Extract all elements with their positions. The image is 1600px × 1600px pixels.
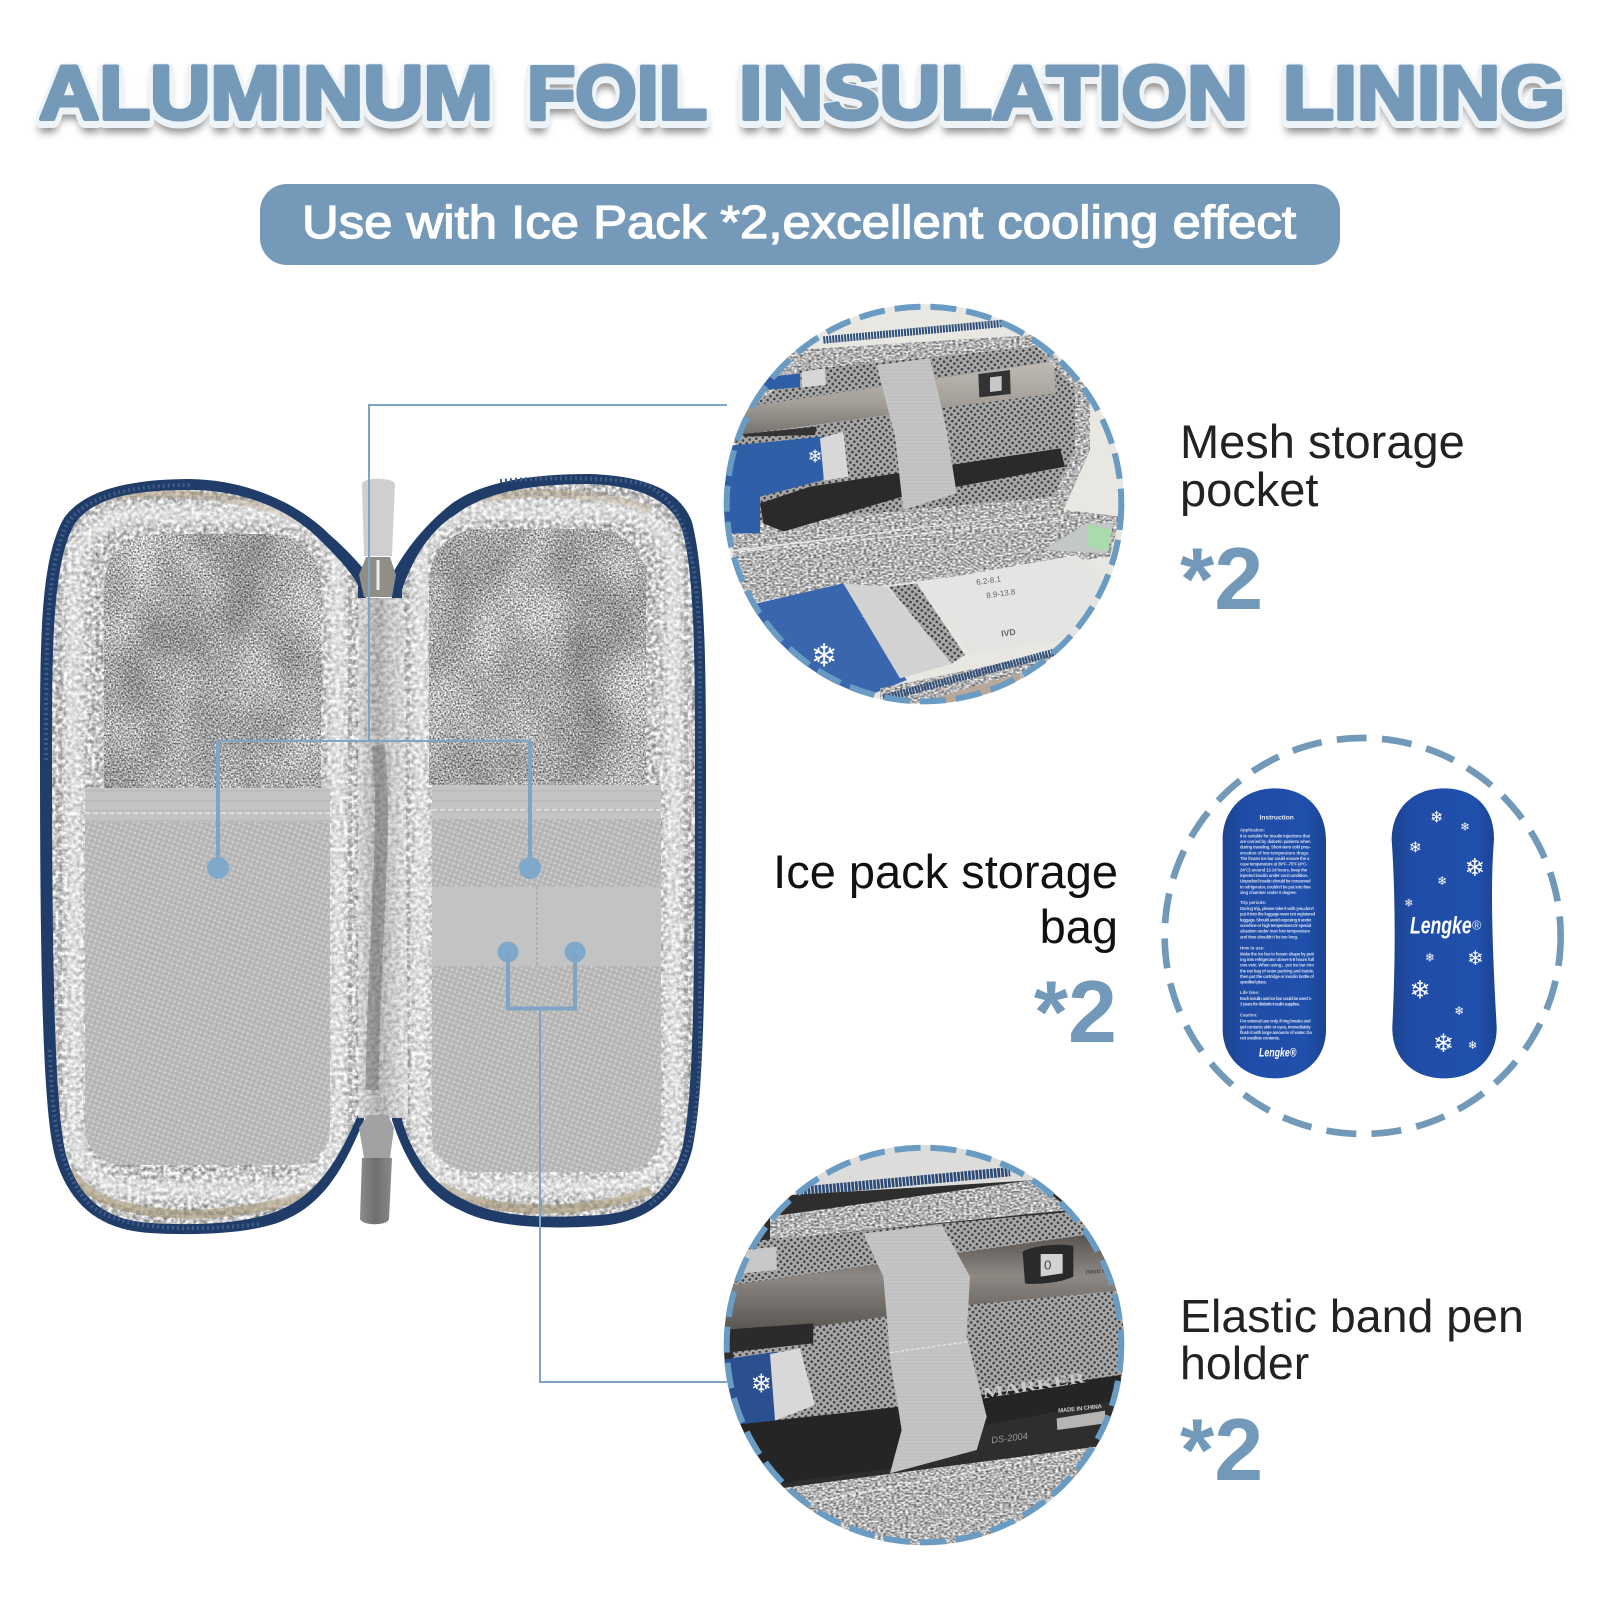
ice pack: instructions side: Instruction [1259,814,1294,821]
detail circle: elastic band pen holder: DS-2004 [991,1431,1028,1445]
ice pack: instructions side: It is suitable for insulin injections that [1240,833,1311,838]
title: INSULATION [739,51,1248,136]
elastic band [432,887,661,966]
label: elastic band pen holder: *2 [1180,1400,1263,1499]
ice pack: instructions side: How to use: [1240,945,1265,950]
ice pack: instructions side: gel contacts skin or eyes, immediately [1240,1024,1311,1029]
ice pack: instructions side: and time shouldn't be too long. [1240,934,1298,939]
ice pack: instructions side: For external use only. If ring breaks and [1240,1019,1311,1024]
case right shell [392,474,706,1227]
ice pack: instructions side: case temperature at 39°F -75°F (4°C- [1240,862,1308,867]
ice pack: instructions side: Unpacked insulin should be conserved [1240,879,1311,884]
detail circle: elastic band pen holder: ❄ [750,1370,772,1400]
title: FOIL [527,62,707,147]
snowflakes: ❄ [1437,874,1447,888]
ice pack: instructions side: Lengke® [1259,1046,1296,1060]
snowflakes: ❄ [1454,1004,1464,1018]
detail circle: ice packs [1165,738,1561,1134]
snowflakes: ❄ [1409,839,1422,857]
title [39,51,1565,147]
label: mesh storage pocket: pocket [1180,463,1318,516]
detail circle: elastic band pen holder [720,1140,1130,1550]
detail circle: mesh storage pocket: IVD [1001,627,1016,639]
ice pack: instructions side: in refrigerator, couldn't be put into free [1240,884,1311,889]
ice pack: instructions side: one vein. When using，put ice bar into [1240,963,1314,969]
bottom zipper pull [359,1115,394,1224]
label: elastic band pen holder: holder [1180,1337,1309,1389]
snowflakes: ❄ [1460,819,1470,833]
title: INSULATION [739,54,1248,139]
title: INSULATION [739,62,1248,147]
label: mesh storage pocket: *2 [1180,529,1263,628]
ice pack: instructions side: zing chamber under 0 degree. [1240,890,1297,895]
ice pack: instructions side: During trip, please take it with you,don't [1240,906,1315,911]
left mesh pocket [85,788,330,1165]
detail circle: mesh storage pocket [720,300,1130,710]
label: ice pack storage bag: Ice pack storage [773,845,1118,898]
snowflakes: ❄ [1465,853,1485,882]
left upper foil panel [104,534,321,790]
ice pack: instructions side: during traveling. Short-term cold pres- [1240,845,1311,850]
title: FOIL [527,51,707,136]
ice pack: instructions side: Caution: [1240,1013,1258,1018]
ice pack: instructions side: The frozen ice bar could ensure the a [1240,856,1310,861]
title: ALUMINUM [39,54,493,139]
snowflakes: ❄ [1425,951,1435,965]
ice pack: instructions side: Trip periods: [1240,900,1267,905]
label: ice pack storage bag [773,845,1118,1061]
top zipper pull [359,479,396,597]
ice pack: instructions side: ervation of low temperature drugs. [1240,850,1309,855]
detail circle: mesh storage pocket: 8.9-13.8 [986,587,1017,600]
detail circle: elastic band pen holder: novo no [1086,1267,1110,1276]
ice pack: instructions side: specified place. [1240,980,1267,985]
right mesh pocket [432,785,661,1172]
ice pack: instructions side: Life time: [1240,990,1260,995]
ice pack: instructions side: luggage. Should avoid exposing it under [1240,917,1312,922]
ice pack: logo side: Lengke [1410,912,1472,939]
ice pack: instructions side: Each insulin and ice bar could be used 1- [1240,996,1313,1001]
ice pack: instructions side [1223,788,1326,1078]
snowflakes: ❄ [1409,975,1431,1005]
case left shell [40,479,370,1240]
title: LINING [1283,54,1565,139]
subtitle pill [260,184,1340,265]
label: elastic band pen holder [1180,1290,1524,1499]
ice pack: instructions side: Application: [1240,827,1266,832]
label: mesh storage pocket [1180,415,1465,628]
detail circle: mesh storage pocket: 6.2-8.1 [976,575,1002,587]
label: elastic band pen holder: Elastic band pen [1180,1290,1524,1342]
ice pack: instructions side: ing into refrigerator above 6-8 hours full [1240,957,1314,962]
title: FOIL [527,54,707,139]
ice pack: instructions side: situation under over low temperature [1240,929,1311,934]
ice pack: instructions side: not swallow contents. [1240,1036,1280,1041]
label: ice pack storage bag: *2 [1034,962,1117,1061]
detail circle: elastic band pen holder: MARKER [981,1370,1087,1402]
product: open insulated case [40,474,706,1240]
title: ALUMINUM [39,62,493,147]
ice pack: instructions side: the net bag of outer packing and inside, [1240,968,1314,973]
snowflakes: ❄ [1404,897,1413,910]
detail circle: elastic band pen holder: 0 [1044,1257,1051,1272]
ice pack: instructions side: sunshine or high temperature.Or special [1240,923,1311,928]
right upper foil panel [429,529,646,785]
label: mesh storage pocket: Mesh storage [1180,415,1465,468]
snowflakes [1404,808,1485,1058]
detail circle: mesh storage pocket: ❄ [861,605,874,623]
snowflakes: ❄ [1468,1038,1477,1052]
snowflakes: ❄ [1467,946,1484,970]
callout dots: pockets [207,857,586,962]
subtitle pill: Use with Ice Pack *2,excellent cooling effect [302,196,1296,248]
snowflakes: ❄ [1433,1028,1454,1058]
detail circle: elastic band pen holder: MADE IN CHINA [1058,1404,1103,1415]
ice pack: instructions side: flush it with large amounts of water. Do [1240,1030,1312,1035]
ice pack: instructions side: put it into the luggage even not registered [1240,912,1316,917]
ice pack: logo side [1392,788,1497,1078]
ice pack: instructions side: then put the cartridge or insulin bottle of [1240,974,1315,979]
title: LINING [1283,62,1565,147]
ice pack: logo side: ® [1472,918,1482,932]
title: LINING [1283,51,1565,136]
ice pack: instructions side: injected insulin under cool condition. [1240,873,1308,878]
ice pack: instructions side: Make the ice bar to forzen shape by putt [1240,951,1315,956]
title: ALUMINUM [39,51,493,136]
callout lines and dots [207,405,727,1382]
detail circle: mesh storage pocket: ❄ [807,447,823,468]
detail circle: mesh storage pocket: ❄ [811,637,837,675]
ice pack: instructions side: 24°C) around 12-24 hours, keep the [1240,867,1308,872]
ice pack: instructions side: 3 years for diabetic insulin supplies. [1240,1002,1300,1007]
snowflakes: ❄ [1430,808,1443,827]
label: ice pack storage bag: bag [1040,900,1118,953]
ice pack: instructions side: are carried by diabetic patients when [1240,839,1311,844]
centre gusset [358,598,408,1118]
